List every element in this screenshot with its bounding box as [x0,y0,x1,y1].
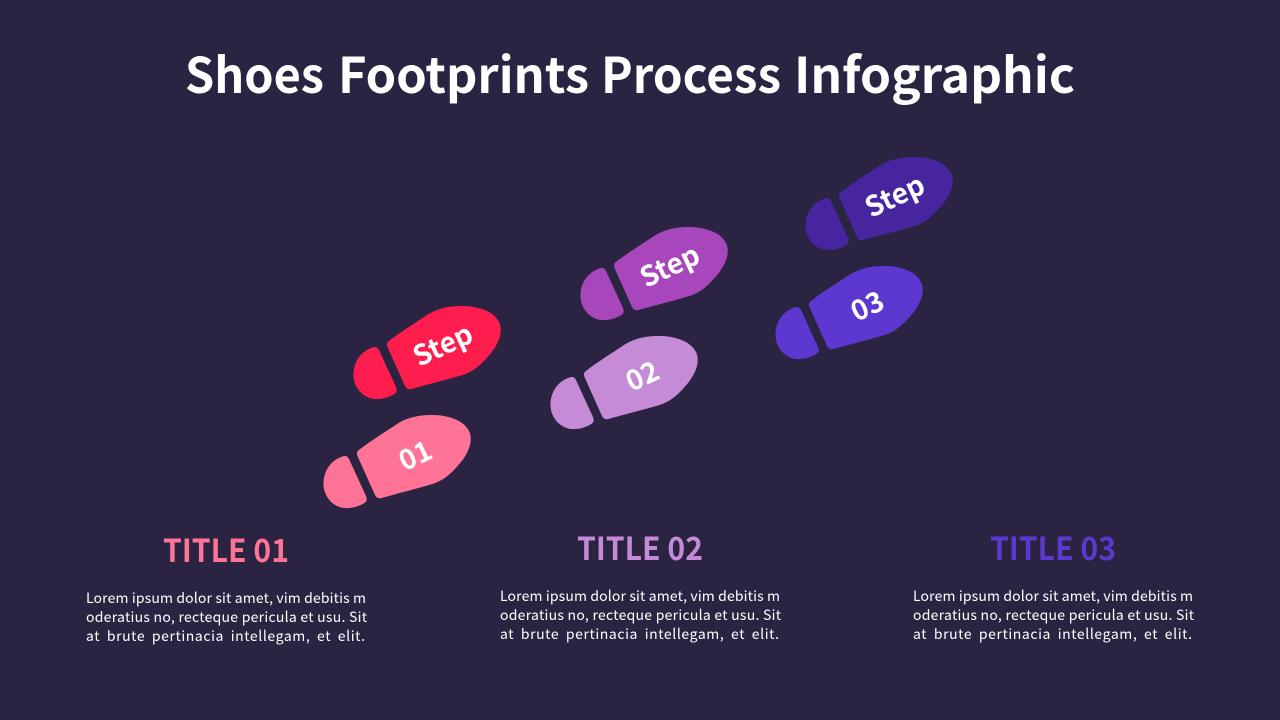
text block: description 03: Lorem ipsum dolor sit amet, vim debitis m [913,586,1193,606]
panel: title 03 text [913,524,1195,644]
title: Process [601,37,781,108]
icon: purple footprint with Step label [580,227,728,320]
text block: description 02 [500,586,782,644]
footprints: step 1 [324,306,501,508]
text block: description 03: oderatius no, recteque pericula et usu. Sit [913,605,1195,625]
icon: red footprint with Step label [354,306,501,399]
text block: description 02: at brute pertinacia intellegam, et elit. [500,624,779,644]
icon: dark violet footprint with Step label [806,157,953,250]
text block: description 03 [913,586,1195,644]
text block: description 03: at brute pertinacia intellegam, et elit. [913,624,1192,644]
heading: TITLE 02: TITLE 02 [577,524,703,570]
icon: blue-violet footprint with 03 label [776,266,923,359]
text block: description 01 [86,588,368,646]
icon: lilac footprint with 02 label [550,336,698,429]
icon: pink footprint with 01 label [324,415,471,508]
title: Shoes [185,37,324,108]
label: 01: 01 [391,429,438,480]
title: Footprints [338,37,589,108]
panel: title 01 text [86,526,368,646]
heading: TITLE 03: TITLE 03 [990,524,1116,570]
label: Step: Step [633,234,706,296]
label: 03: 03 [843,280,890,330]
panel: title 02 text [500,524,782,644]
footprints: step 3 [776,157,953,359]
heading: TITLE 01: TITLE 01 [163,526,289,572]
text block: description 02: Lorem ipsum dolor sit amet, vim debitis m [500,586,780,606]
text block: description 01: at brute pertinacia intellegam, et elit. [86,626,365,646]
text block: description 01: Lorem ipsum dolor sit amet, vim debitis m [86,588,366,608]
label: Step: Step [406,313,479,375]
footprints: step 2 [550,227,728,429]
label: 02: 02 [618,350,665,400]
title: Infographic [794,37,1075,108]
text block: description 01: oderatius no, recteque pericula et usu. Sit [86,607,368,627]
title [185,37,1075,108]
text block: description 02: oderatius no, recteque pericula et usu. Sit [500,605,782,625]
label: Step: Step [858,164,931,226]
